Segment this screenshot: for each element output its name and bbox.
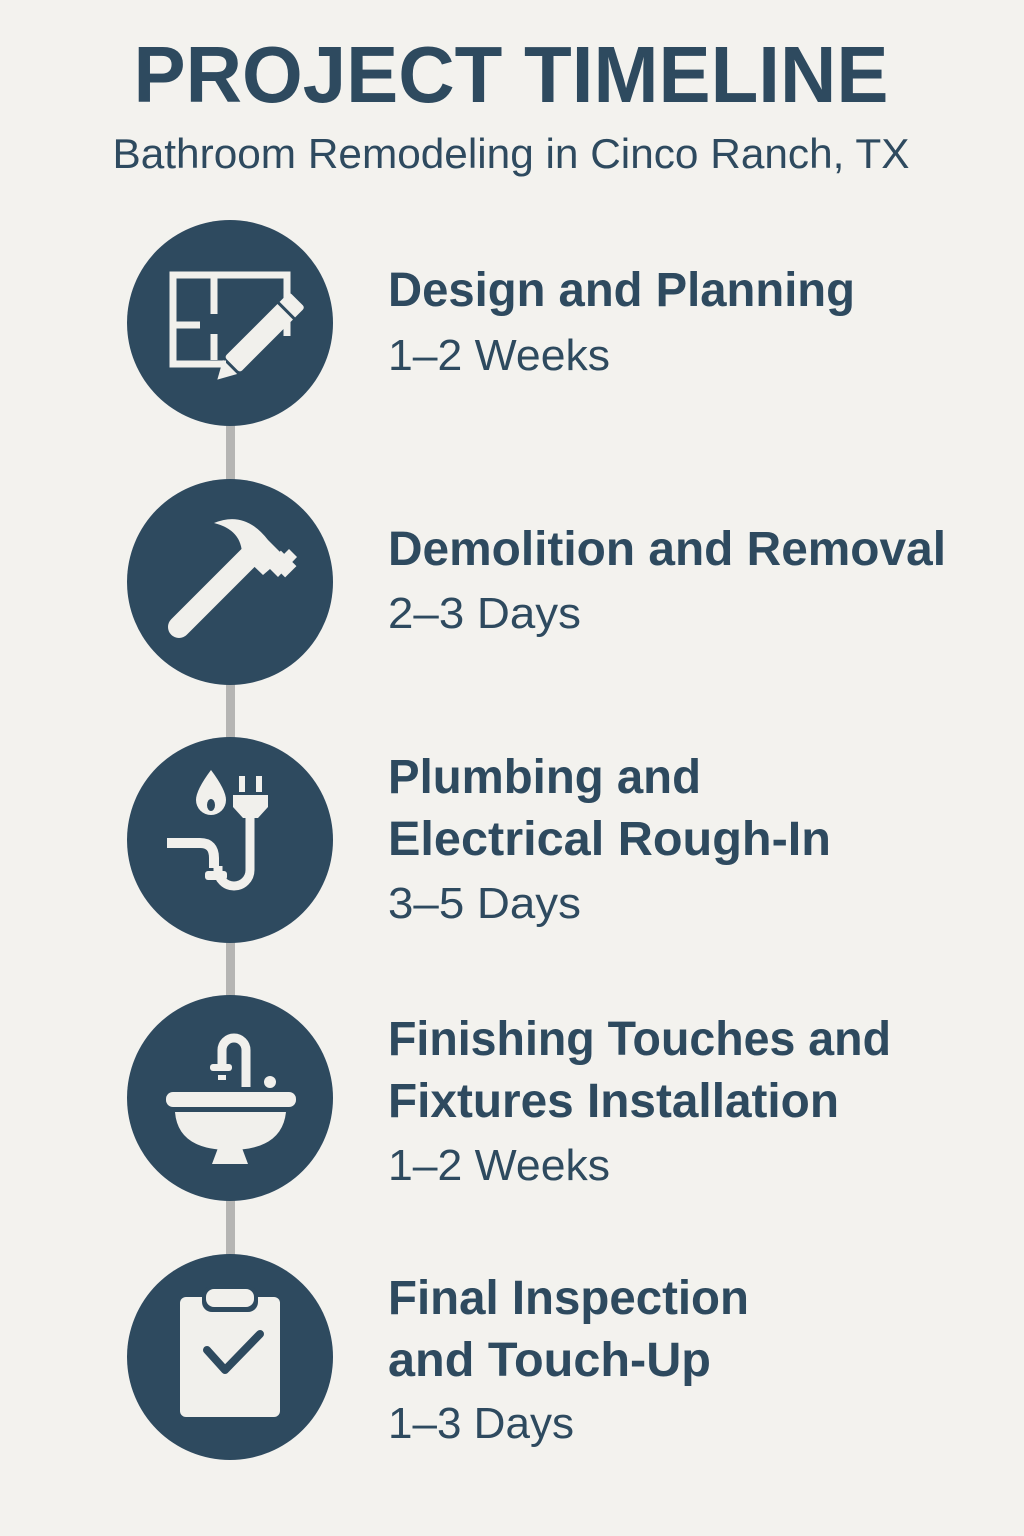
timeline connector [226, 420, 235, 1270]
step 3: plumbing & electrical [127, 737, 831, 943]
heading: Finishing Touches and [388, 1013, 891, 1066]
step 5: final inspection [127, 1254, 749, 1460]
step 3: plumbing & electrical: Electrical Rough-In [388, 813, 831, 866]
icon: clipboard check [127, 1254, 333, 1460]
step 5: final inspection: and Touch-Up [388, 1334, 711, 1387]
icon: hammer [127, 479, 333, 685]
duration: 1–3 Days [388, 1399, 574, 1448]
heading: Design and Planning [388, 264, 855, 317]
step 4: finishing: Fixtures Installation [388, 1075, 839, 1128]
duration: 1–2 Weeks [388, 1141, 610, 1190]
heading: Demolition and Removal [388, 523, 946, 576]
heading: Plumbing and [388, 751, 701, 804]
subtitle: Bathroom Remodeling in Cinco Ranch, TX [112, 130, 909, 177]
step 4: finishing [127, 995, 891, 1201]
icon: blueprint and pencil [127, 220, 333, 426]
icon: sink and faucet [127, 995, 333, 1201]
step 1: design and planning [127, 220, 855, 426]
duration: 1–2 Weeks [388, 331, 610, 380]
title: PROJECT TIMELINE [134, 30, 888, 119]
step 2: demolition [127, 479, 946, 685]
duration: 2–3 Days [388, 589, 581, 638]
heading: Final Inspection [388, 1272, 749, 1325]
icon: water drop, pipe and plug [127, 737, 333, 943]
duration: 3–5 Days [388, 879, 581, 928]
